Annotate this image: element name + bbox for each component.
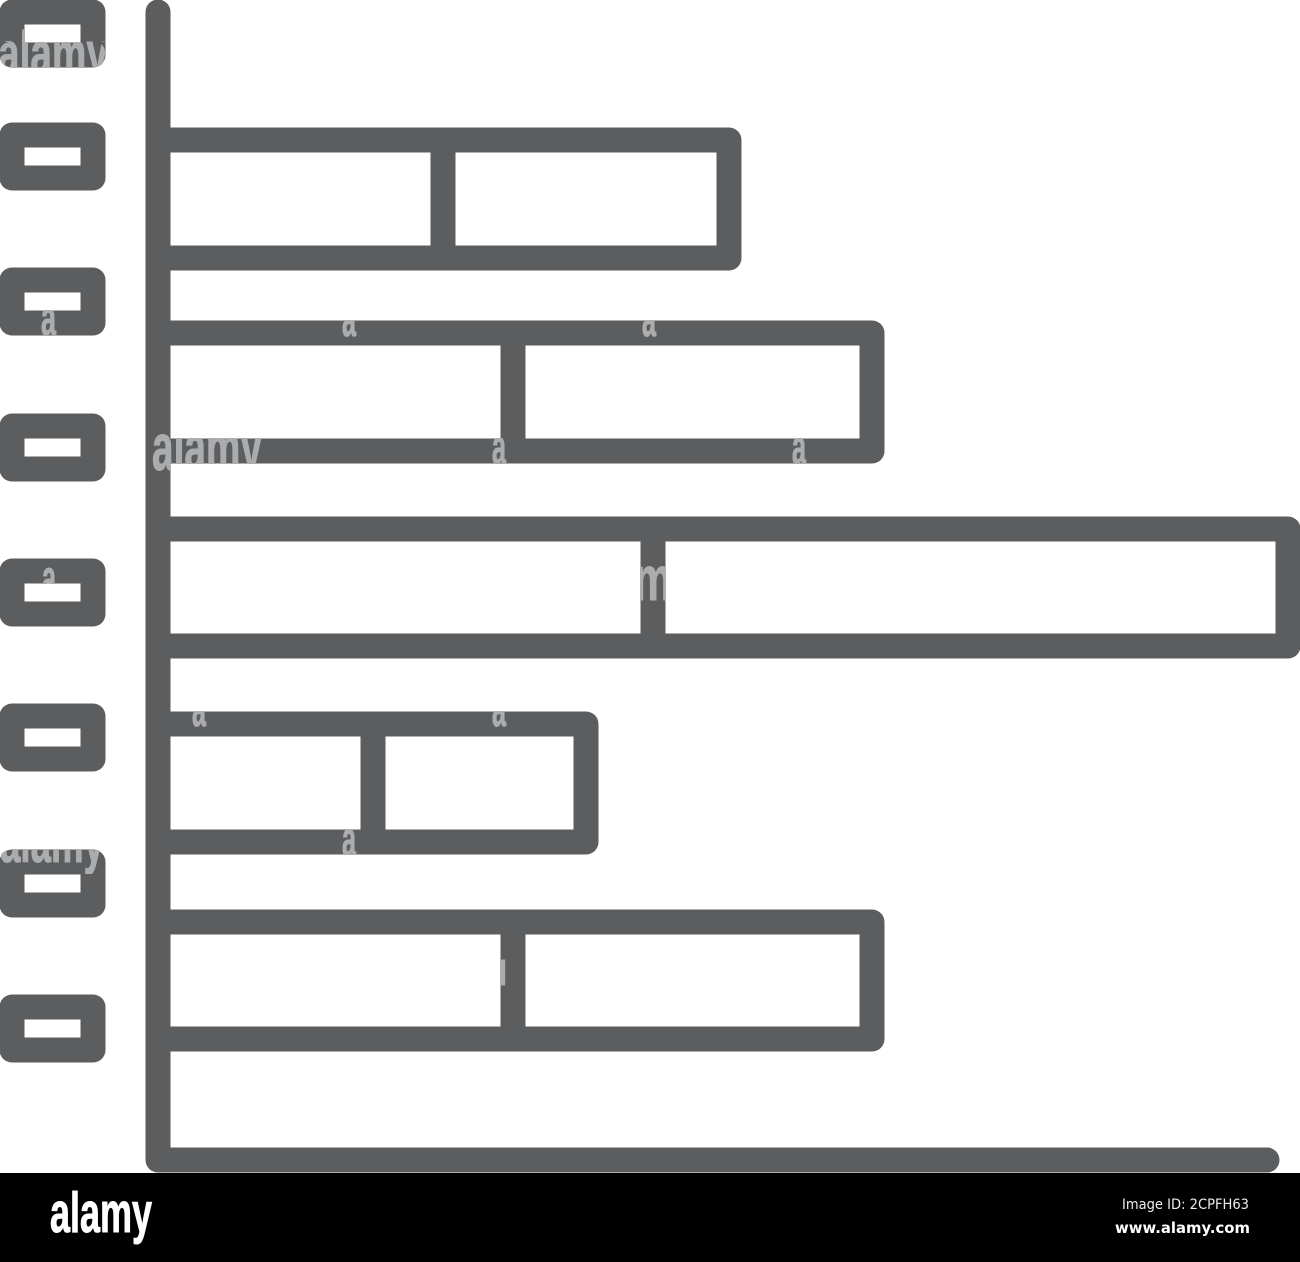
bars <box>158 140 1288 1039</box>
bar 5 <box>158 922 872 1039</box>
axis lines <box>158 12 1267 1160</box>
tick label 3 <box>12 280 93 323</box>
bar 3 <box>158 529 1288 646</box>
tick label 7 <box>12 862 93 905</box>
tick label 4 <box>12 426 93 469</box>
watermark letter tick 5: a <box>42 550 57 606</box>
alamy logo: alamy <box>50 1181 152 1245</box>
watermark letter bar 4 top left: a <box>192 681 207 737</box>
watermark letter bar 2 bottom right: a <box>792 419 807 475</box>
watermark fragments visible on dark strokes <box>0 20 807 993</box>
image id: Image ID: 2CPFH63 <box>1122 1197 1249 1213</box>
bar 2 <box>158 333 872 451</box>
watermark letter bar 2 top left: a <box>342 291 357 347</box>
watermark letter bar 4 bottom: a <box>342 811 357 867</box>
bar 4 <box>158 724 586 842</box>
watermark letter tick 3: a <box>41 290 57 346</box>
watermark letter bar 2 top right: a <box>642 291 657 347</box>
watermark on axis: alamy <box>152 410 262 484</box>
axis tick labels <box>12 12 93 1050</box>
tick label 5 <box>12 571 93 614</box>
watermark letter bar 4 top right: a <box>492 681 507 737</box>
tick label 2 <box>12 135 93 178</box>
tick label 6 <box>12 716 93 759</box>
watermark letter on bar 3 divider: m <box>634 545 672 614</box>
watermark top left: alamy <box>0 20 108 87</box>
footer band <box>0 1173 1300 1262</box>
watermark letter bar 2 bottom left: a <box>492 419 507 475</box>
watermark letter on bar 5 divider: l <box>498 955 507 993</box>
watermark lower left: alamy <box>0 808 104 875</box>
bar 1 <box>158 140 729 258</box>
url: www.alamy.com <box>1115 1219 1250 1237</box>
tick label 1 <box>12 12 93 55</box>
tick label 8 <box>12 1007 93 1050</box>
